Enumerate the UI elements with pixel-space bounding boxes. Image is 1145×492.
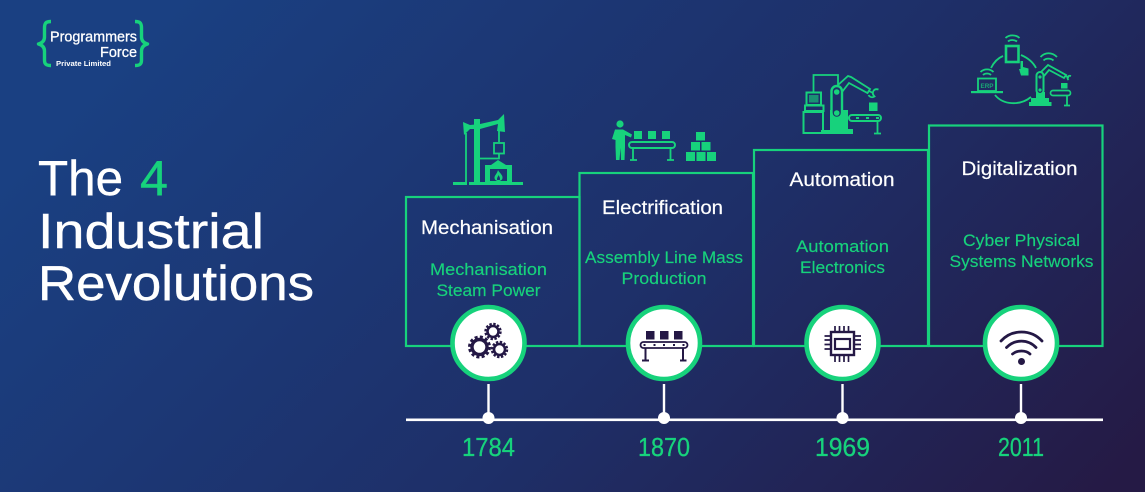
panel: Automation: Automation [796,237,889,256]
icon: worker and conveyor [612,120,716,161]
icon: gears [452,307,524,379]
logo: Programmers Force: Force [100,44,137,61]
logo: Programmers Force: Private Limited [56,61,111,68]
panel: Digitalization: Digitalization [962,159,1078,180]
panel: Mechanisation: Mechanisation [430,260,547,279]
year: 2011: 2011 [998,434,1044,462]
icon: steam engine [453,114,523,185]
icon: robot arm at workstation [804,75,881,134]
panel: Electrification [580,173,753,346]
icon: connected devices: ERP [980,83,994,90]
icon: wifi [985,307,1057,379]
year: 1784: 1784 [462,434,515,462]
panel: Digitalization: Cyber Physical [963,231,1080,250]
panel: Automation: Electronics [800,258,885,277]
panel: Electrification: Electrification [602,198,723,219]
panel: Digitalization [929,126,1102,346]
logo: Programmers Force [38,22,148,68]
title: Revolutions [38,257,314,311]
logo: Programmers Force: Programmers [50,28,137,46]
title: 4 [140,152,168,206]
panel: Electrification: Assembly Line Mass [585,248,743,267]
icon: microchip [806,307,878,379]
panel: Automation: Automation [790,170,894,191]
title: Industrial [38,205,264,259]
panel: Mechanisation: Mechanisation [421,218,553,239]
year: 1870: 1870 [638,434,690,462]
title [38,152,314,311]
year: 1969: 1969 [815,434,870,462]
icon: connected devices [971,35,1071,106]
icon: conveyor belt [628,307,700,379]
panel: Digitalization: Systems Networks [950,252,1094,271]
timeline axis [406,384,1103,424]
panel: Mechanisation [406,197,580,346]
panel: Mechanisation: Steam Power [436,281,541,300]
panel: Electrification: Production [622,269,706,288]
title: The [38,152,123,206]
panel: Automation [754,150,928,346]
